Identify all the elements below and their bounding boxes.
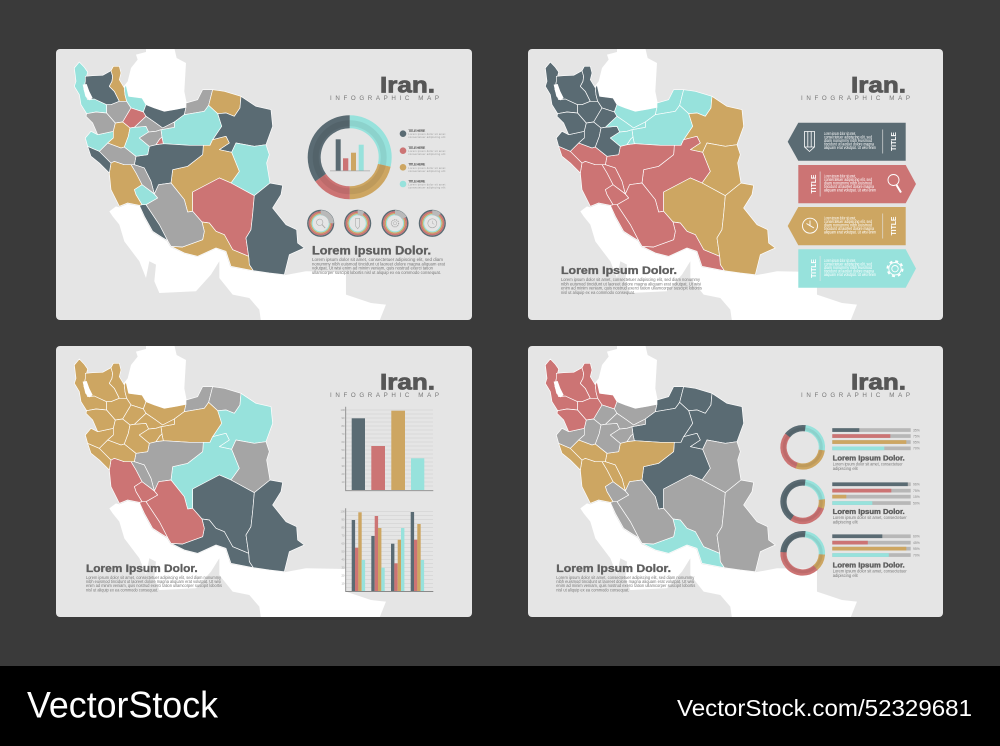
arrow: dark pencil: [788, 123, 906, 161]
panel 4 title: INFOGRAPHIC MAP: [801, 392, 910, 399]
arrow: teal gear: consectetuer adipiscing elit, sed: [824, 262, 873, 266]
panel 3 text block: nibh euismod tincidunt ut laoreet dolore magna aliquam erat volutpat. Ut wisi: [86, 579, 221, 584]
donut centre bars: [330, 139, 370, 171]
panel 4 text block: [556, 563, 695, 592]
arrow: dark pencil: TITLE: [889, 132, 898, 151]
panel 2 title: Iran.: [851, 72, 906, 97]
panel 1 legend: [400, 129, 446, 190]
sea background: [580, 345, 857, 618]
panel 1 text block: ullamcorper suscipit lobortis nisl ut aliquip ex ea commodo consequat.: [312, 270, 441, 275]
panel 1 legend: consectetuer adipiscing elit: [408, 169, 446, 173]
panel 4 text block: Lorem ipsum dolor sit amet, consectetuer adipiscing elit, sed diam nonummy: [556, 575, 695, 580]
donut row 3: Lorem Ipsum Dolor.: [833, 562, 905, 570]
panel 1 legend: Lorem ipsum dolor sit amet: [408, 132, 446, 136]
donut row 2: 75%: [913, 489, 920, 493]
sea background: [580, 48, 857, 321]
donut row 1: 35%: [913, 428, 920, 432]
donut row 3: 95%: [913, 547, 920, 551]
arrow: red magnifier: tincidunt ut laoreet dolore magna: [824, 184, 875, 189]
panel 1 text block: volutpat. Ut wisi enim ad minim veniam, quis nostrud exerci tation: [312, 266, 434, 271]
arrow: gold clock: [788, 207, 906, 245]
donut row 1: 95%: [913, 440, 920, 444]
bar chart: grouped series: 80: [342, 526, 345, 530]
ring: clock: [420, 210, 445, 236]
map of Iran: [74, 359, 304, 572]
arrow: dark pencil: Lorem ipsum dolor sit amet,: [824, 131, 856, 136]
footer bar: VectorStock: [27, 684, 218, 726]
donut row 2: [776, 475, 920, 528]
arrow: gold clock: diam nonummy nibh euismod: [824, 222, 873, 228]
donut row 1: 70%: [913, 447, 920, 451]
bar chart: single series: 50: [342, 448, 345, 452]
bar chart: single series: [340, 407, 433, 491]
arrow: gold clock: TITLE: [889, 216, 898, 236]
panel 1 text block: [312, 244, 446, 275]
donut row 3: [776, 526, 920, 580]
ring: pencil: [345, 210, 370, 236]
bar chart: grouped series: 50: [342, 550, 345, 554]
bar chart: single series: 80: [342, 424, 345, 428]
arrow: teal gear: tincidunt ut laoreet dolore magna: [824, 268, 875, 274]
donut row 3: 70%: [913, 553, 920, 557]
arrow: teal gear: diam nonummy nibh euismod: [824, 265, 873, 270]
arrow: teal gear: TITLE: [809, 259, 818, 278]
panel 1 legend: TITLE HERE: [408, 146, 426, 150]
panel 3 text block: Lorem ipsum dolor sit amet, consectetuer adipiscing elit, sed diam nonummy: [86, 575, 222, 580]
panel 1 text block: Lorem ipsum dolor sit amet, consectetuer adipiscing elit, sed diam: [312, 257, 443, 262]
donut row 2: 15%: [913, 495, 920, 499]
panel 4 text block: nibh euismod tincidunt ut laoreet dolore magna aliquam erat volutpat. Ut wisi: [556, 579, 694, 584]
panel 1 legend: TITLE HERE: [408, 129, 426, 133]
donut row 2: Lorem Ipsum Dolor.: [833, 509, 905, 516]
panel 2 text block: Lorem ipsum dolor sit amet, consectetuer adipiscing elit, sed diam nonummy: [561, 277, 701, 282]
bar chart: single series: 20: [342, 472, 345, 476]
arrow: gold clock: Lorem ipsum dolor sit amet,: [824, 216, 856, 220]
panel 3 text block: nisl ut aliquip ex ea commodo consequat.: [86, 587, 158, 592]
bar chart: grouped series: 30: [342, 566, 345, 570]
panel 1 legend: consectetuer adipiscing elit: [408, 186, 446, 190]
donut row 3: 60%: [913, 535, 920, 539]
arrow: gold clock: aliquam erat volutpat. Ut wisi enim: [824, 230, 876, 234]
panel 3 text block: [86, 563, 222, 592]
arrow: dark pencil: tincidunt ut laoreet dolore magna: [824, 142, 875, 146]
arrow: dark pencil: diam nonummy nibh euismod: [824, 138, 873, 143]
panel 3: regions with bar charts: [56, 345, 472, 618]
arrow: red magnifier: aliquam erat volutpat. Ut wisi enim: [824, 188, 876, 192]
panel 2: regions with arrows: [528, 48, 943, 321]
icon: pencil: [804, 132, 814, 152]
map of Iran: [545, 62, 775, 275]
panel 3 title: INFOGRAPHIC MAP: [330, 392, 439, 399]
panel 4: regions with donut rows: [528, 345, 943, 618]
bar chart: grouped series: [340, 508, 433, 592]
arrow: teal gear: aliquam erat volutpat. Ut wisi enim: [824, 272, 876, 277]
bar chart: single series: 60: [342, 440, 345, 444]
arrow: gold clock: consectetuer adipiscing elit, sed: [824, 219, 873, 224]
bar chart: single series: 10: [342, 480, 345, 484]
donut row 1: adipiscing elit: [833, 466, 858, 471]
panel 3 title: Iran.: [380, 369, 435, 394]
sea background: [109, 345, 386, 618]
panel 1 title: [330, 72, 439, 102]
panel 3 text block: Lorem Ipsum Dolor.: [86, 563, 198, 575]
panel 4 title: Iran.: [851, 369, 906, 394]
donut row 2: adipiscing elit: [833, 520, 858, 524]
donut row 1: Lorem ipsum dolor sit amet, consectetuer: [833, 462, 903, 466]
bar chart: single series: 70: [342, 432, 345, 436]
bar chart: single series: 30: [342, 464, 345, 468]
panel 1 donut chart: [300, 108, 399, 207]
arrow: gold clock: tincidunt ut laoreet dolore magna: [824, 226, 875, 231]
panel 1 legend: TITLE HERE: [408, 179, 426, 183]
bar chart: grouped series: 60: [342, 542, 345, 546]
bar chart: single series: 40: [342, 456, 345, 460]
donut row 1: [776, 420, 920, 474]
arrow: teal gear: Lorem ipsum dolor sit amet,: [824, 258, 856, 263]
arrow: teal gear: [798, 249, 916, 288]
panel 1 legend: consectetuer adipiscing elit: [408, 135, 446, 139]
arrow: red magnifier: [798, 165, 916, 203]
panel 1 legend: consectetuer adipiscing elit: [408, 152, 446, 156]
panel 2 text block: [561, 265, 702, 295]
panel 4 text block: Lorem Ipsum Dolor.: [556, 563, 671, 575]
panel 2 title: INFOGRAPHIC MAP: [801, 95, 910, 102]
donut row 3: adipiscing elit: [833, 573, 858, 578]
arrow: red magnifier: TITLE: [809, 174, 818, 194]
panel 1: multicolour provinces with donut: [56, 48, 472, 321]
panel 3 title: [330, 369, 439, 399]
footer bar: VectorStock.com/52329681: [677, 695, 972, 721]
panel 1 text block: Lorem Ipsum Dolor.: [312, 244, 431, 258]
bar chart: grouped series: 70: [342, 534, 345, 538]
donut row 2: 96%: [913, 483, 920, 487]
panel 3 text block: enim ad minim veniam, quis nostrud exerci tation ullamcorper suscipit lobortis: [86, 583, 222, 588]
icon: magnifier: [888, 174, 901, 192]
arrow: red magnifier: consectetuer adipiscing elit, sed: [824, 177, 873, 182]
panel 2 text block: nibh euismod tincidunt ut laoreet dolore magna aliquam erat volutpat. Ut wisi: [561, 281, 701, 286]
panel 1 legend: Lorem ipsum dolor sit amet: [408, 166, 446, 170]
bar chart: single series: 90: [342, 416, 345, 420]
icon: clock: [802, 218, 818, 233]
bar chart: grouped series: 100: [340, 510, 345, 514]
arrow: red magnifier: diam nonummy nibh euismod: [824, 180, 873, 186]
donut row 3: 45%: [913, 541, 920, 545]
panel 2 text block: nisl ut aliquip ex ea commodo consequat.: [561, 290, 635, 295]
panel 1 legend: Lorem ipsum dolor sit amet: [408, 149, 446, 153]
panel 4 text block: nisl ut aliquip ex ea commodo consequat.: [556, 587, 629, 592]
donut row 3: Lorem ipsum dolor sit amet, consectetuer: [833, 568, 907, 574]
donut row 2: 50%: [913, 501, 920, 505]
icon: gear: [887, 261, 903, 276]
panel 1 title: INFOGRAPHIC MAP: [330, 95, 439, 102]
map of Iran: [74, 62, 304, 275]
panel 1 title: Iran.: [380, 72, 435, 97]
arrow: red magnifier: Lorem ipsum dolor sit amet,: [824, 174, 856, 178]
bar chart: grouped series: 10: [342, 582, 345, 586]
bar chart: grouped series: 20: [342, 574, 345, 578]
map of Iran: [545, 359, 775, 572]
arrow: dark pencil: aliquam erat volutpat. Ut wisi enim: [824, 145, 876, 150]
panel 1 legend: TITLE HERE: [408, 163, 426, 167]
donut row 1: 75%: [913, 434, 920, 438]
bar chart: single series: 100: [340, 408, 345, 412]
ring: magnifier: [308, 210, 334, 236]
arrow: dark pencil: consectetuer adipiscing elit, sed: [824, 134, 873, 140]
donut row 2: Lorem ipsum dolor sit amet, consectetuer: [833, 515, 907, 520]
donut row 1: Lorem Ipsum Dolor.: [833, 456, 905, 462]
bar chart: grouped series: 40: [342, 558, 345, 562]
panel 1 text block: nonummy nibh euismod tincidunt ut laoreet dolore magna aliquam erat: [312, 261, 446, 266]
panel 1 legend: Lorem ipsum dolor sit amet: [408, 182, 446, 186]
panel 1 icon rings: [308, 210, 445, 236]
ring: gear: [382, 210, 408, 236]
sea background: [109, 48, 386, 321]
panel 2 title: [801, 72, 910, 102]
panel 4 title: [801, 369, 910, 399]
panel 2 text block: Lorem Ipsum Dolor.: [561, 265, 677, 277]
panel 4 text block: enim ad minim veniam, quis nostrud exerci tation ullamcorper suscipit lobortis: [556, 583, 695, 588]
bar chart: grouped series: 90: [342, 518, 345, 522]
footer bar: [0, 666, 1000, 746]
panel 2 text block: enim ad minim veniam, quis nostrud exerci tation ullamcorper suscipit lobortis: [561, 286, 702, 291]
